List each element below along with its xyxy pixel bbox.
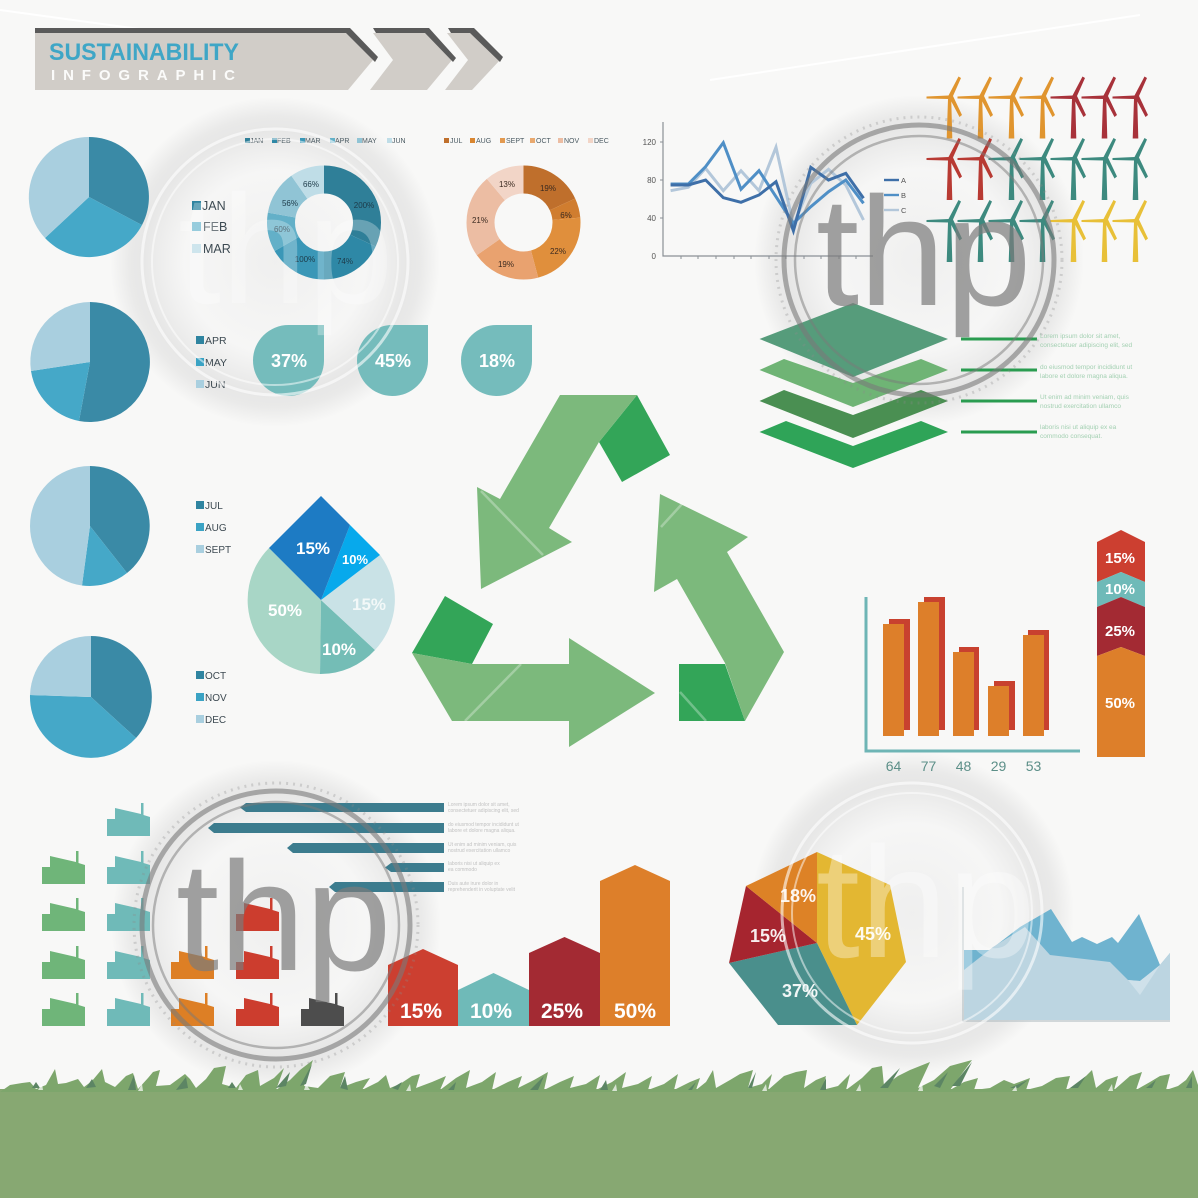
bar chart: 29 (991, 758, 1006, 774)
teardrop 45% (357, 325, 428, 396)
donut chart: orange: 6% (560, 211, 572, 220)
heptagon pie chart: 37% (782, 981, 818, 1001)
heptagon pie chart: 18% (780, 886, 816, 906)
donut chart: orange (472, 180, 572, 269)
water drop pie chart: 15% (352, 595, 386, 614)
factory icons grid (42, 803, 344, 1026)
teardrop 37% (253, 325, 324, 396)
horizontal bars with captions: reprehenderit in voluptate velit (448, 887, 516, 893)
watermark: bottom-right: thp (816, 815, 1036, 991)
horizontal bars with captions: nostrud exercitation ullamco (448, 848, 510, 854)
horizontal bars with captions: consectetuer adipiscing elit, sed (448, 808, 519, 814)
legend: orange donut: SEPT (506, 138, 525, 145)
line chart: B (901, 191, 906, 200)
bar chart: 77 (921, 758, 936, 774)
legend: apr may jun: JUN (205, 379, 225, 391)
water drop pie chart: 15% (296, 539, 330, 558)
legend: blue donut (245, 138, 406, 145)
bar chart: 53 (1026, 758, 1041, 774)
bar chart (866, 597, 1080, 774)
legend: jan feb mar: JAN (202, 199, 226, 213)
donut chart: blue (274, 180, 374, 266)
water drop pie chart: 10% (322, 640, 356, 659)
legend: oct nov dec: NOV (205, 693, 227, 704)
layer labels: Ut enim ad minim veniam, quis (1040, 394, 1130, 401)
donut chart: blue: 56% (282, 199, 298, 208)
stacked arrow column: 15% (1105, 550, 1135, 567)
recycling arrows (412, 395, 784, 747)
water drop pie chart: 10% (342, 552, 368, 567)
line chart: 40 (647, 214, 657, 223)
teardrop 45%: 45% (375, 351, 411, 371)
layer labels: laboris nisi ut aliquip ex ea (1040, 424, 1117, 431)
horizontal bars with captions: Duis aute irure dolor in (448, 881, 499, 887)
horizontal bars with captions: Lorem ipsum dolor sit amet, (448, 802, 510, 808)
legend: oct nov dec (196, 671, 227, 726)
legend: orange donut: OCT (536, 138, 552, 145)
donut chart: orange: 22% (550, 247, 566, 256)
bar chart: 48 (956, 758, 971, 774)
legend: orange donut (444, 138, 609, 145)
line chart (643, 122, 907, 261)
layer labels: labore et dolore magna aliqua. (1040, 373, 1128, 380)
horizontal bars with captions: labore et dolore magna aliqua. (448, 828, 516, 834)
teardrop 18% (461, 325, 532, 396)
water drop pie chart (248, 496, 395, 674)
legend: orange donut: AUG (476, 138, 491, 145)
wind turbines grid (926, 76, 1148, 262)
heading: infographic: INFOGRAPHIC (51, 67, 235, 84)
house-shaped percentage bars: 15% (400, 1000, 442, 1023)
pie chart 4 (30, 636, 152, 758)
legend: apr may jun: MAY (205, 357, 227, 369)
donut chart: orange: 19% (540, 184, 556, 193)
horizontal bars with captions (208, 802, 519, 893)
heptagon pie chart: 45% (855, 924, 891, 944)
heading: sustainability: SUSTAINABILITY (49, 39, 239, 66)
heptagon pie chart (729, 852, 906, 1025)
line chart: 0 (652, 252, 657, 261)
stacked arrow column: 10% (1105, 581, 1135, 598)
line chart: 120 (643, 138, 657, 147)
donut chart: blue: 66% (303, 180, 319, 189)
layer labels: nostrud exercitation ullamco (1040, 403, 1121, 410)
house-shaped percentage bars: 50% (614, 1000, 656, 1023)
horizontal bars with captions: ea commodo (448, 867, 477, 873)
heptagon pie chart: 15% (750, 926, 786, 946)
stacked layers diagram (760, 303, 948, 468)
watermark: top-left (142, 129, 408, 395)
horizontal bars with captions: do eiusmod tempor incididunt ut (448, 822, 519, 828)
donut chart: blue: 60% (274, 225, 290, 234)
legend: jan feb mar: FEB (203, 220, 227, 234)
layer labels: commodo consequat. (1040, 433, 1102, 440)
donut chart: orange: 13% (499, 180, 515, 189)
legend: jul aug sept: AUG (205, 523, 227, 534)
donut chart: orange: 21% (472, 216, 488, 225)
legend: jan feb mar: MAR (203, 242, 231, 256)
layer labels: do eiusmod tempor incididunt ut (1040, 364, 1132, 371)
water drop pie chart: 50% (268, 601, 302, 620)
watermark: bottom-left: thp (176, 830, 391, 1003)
watermark: bottom-left (134, 783, 418, 1067)
house-shaped percentage bars: 10% (470, 1000, 512, 1023)
grass strip (0, 1060, 1198, 1198)
house-shaped percentage bars: 25% (541, 1000, 583, 1023)
teardrop 37%: 37% (271, 351, 307, 371)
legend: blue donut: MAR (305, 138, 321, 145)
watermark: top-left: thp (178, 163, 393, 336)
legend: oct nov dec: OCT (205, 671, 226, 682)
legend: blue donut: JAN (250, 138, 263, 145)
donut chart: blue: 100% (295, 255, 315, 264)
layer labels: consectetuer adipiscing elit, sed (1040, 342, 1133, 349)
line chart: A (901, 176, 906, 185)
watermark: top-right (776, 117, 1062, 403)
legend: oct nov dec: DEC (205, 715, 226, 726)
horizontal bars with captions: laboris nisi ut aliquip ex (448, 861, 500, 867)
legend: orange donut: NOV (564, 138, 580, 145)
legend: blue donut: FEB (277, 138, 291, 145)
stacked arrow column: 50% (1105, 695, 1135, 712)
donut chart: blue: 200% (354, 201, 374, 210)
watermark: bottom-right (782, 783, 1042, 1043)
stacked arrow column: 25% (1105, 623, 1135, 640)
line chart: 80 (647, 176, 657, 185)
pie chart 2 (30, 302, 150, 422)
legend: jul aug sept: SEPT (205, 545, 231, 556)
legend: jul aug sept: JUL (205, 501, 223, 512)
line chart: C (901, 206, 907, 215)
layer labels: Lorem ipsum dolor sit amet, (1040, 333, 1120, 340)
legend: orange donut: JUL (450, 138, 463, 145)
house-shaped percentage bars (388, 865, 670, 1026)
area chart (963, 887, 1170, 1021)
layer labels (961, 333, 1133, 440)
title banner (35, 28, 503, 90)
legend: blue donut: JUN (392, 138, 406, 145)
legend: jul aug sept (196, 501, 231, 556)
legend: blue donut: MAY (362, 138, 377, 145)
legend: apr may jun (196, 335, 227, 391)
legend: jan feb mar (192, 199, 231, 256)
pie chart 3 (30, 466, 150, 586)
pie chart 1 (29, 137, 149, 257)
legend: apr may jun: APR (205, 335, 227, 347)
legend: blue donut: APR (335, 138, 349, 145)
watermark: top-right: thp (816, 165, 1031, 338)
donut chart: orange: 19% (498, 260, 514, 269)
legend: orange donut: DEC (594, 138, 609, 145)
donut chart: blue: 74% (337, 257, 353, 266)
teardrop 18%: 18% (479, 351, 515, 371)
stacked arrow column (1097, 530, 1145, 757)
bar chart: 64 (886, 758, 901, 774)
watermark glows (110, 95, 1084, 1090)
horizontal bars with captions: Ut enim ad minim veniam, quis (448, 842, 517, 848)
